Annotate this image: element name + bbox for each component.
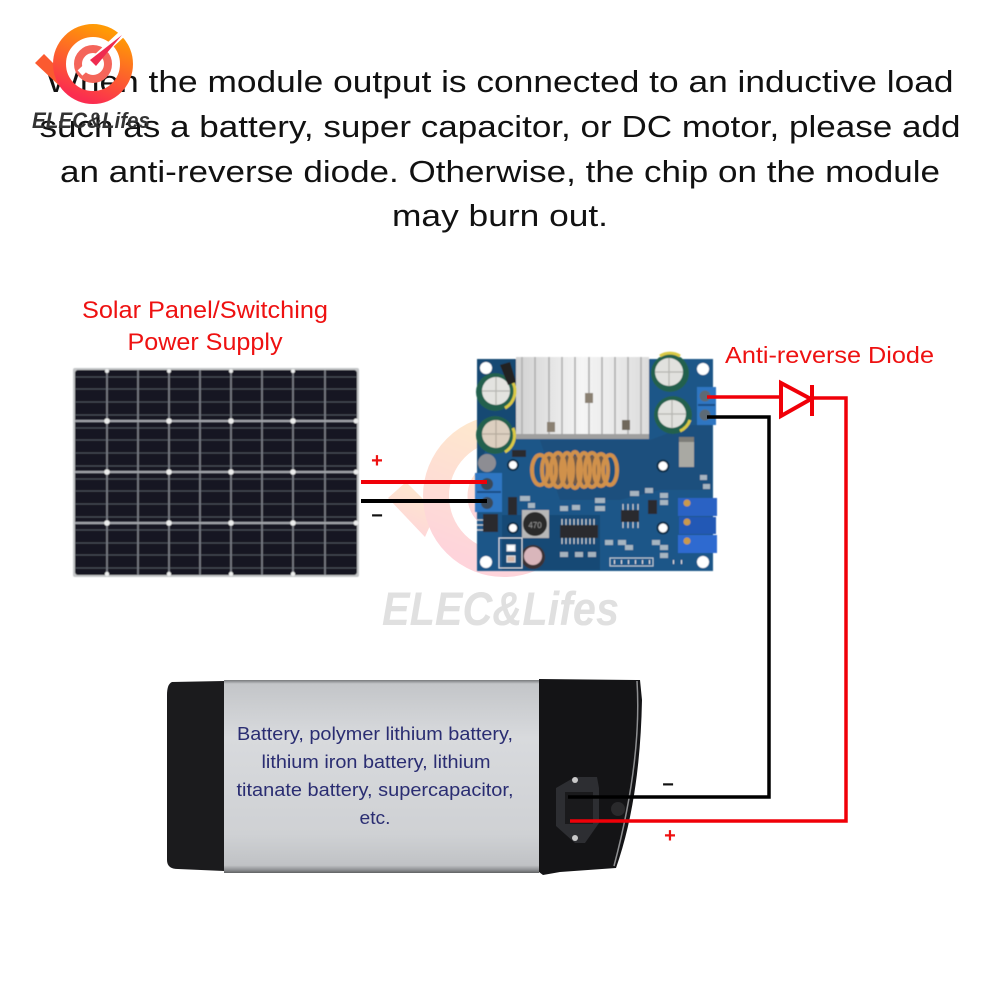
polarity: input plus: + (371, 450, 383, 472)
capacitors (476, 353, 692, 569)
polarity: battery minus: − (662, 774, 674, 796)
polarity: input minus: − (371, 505, 383, 527)
battery text: etc. (360, 807, 390, 828)
battery text: titanate battery, supercapacitor, (236, 779, 514, 800)
watermark text: ELEC&Lifes (382, 582, 619, 635)
input terminal block (475, 473, 502, 512)
gray resistor block (679, 437, 694, 467)
wire: output positive (570, 397, 846, 821)
polarity: battery plus: + (664, 825, 676, 847)
logo text: ELEC&Lifes (32, 108, 150, 133)
header pins (610, 558, 682, 566)
heading text: may burn out. (392, 198, 608, 233)
battery text (236, 723, 514, 828)
solar panel (73, 368, 359, 577)
battery socket (556, 777, 625, 843)
ICs and SMD parts (483, 450, 657, 538)
wire: input positive (361, 480, 487, 484)
heading text: an anti-reverse diode. Otherwise, the chip on the module (60, 154, 940, 189)
label: anti-reverse diode: Anti-reverse Diode (725, 342, 934, 368)
heading text: When the module output is connected to an inductive load (46, 64, 954, 99)
circuit board module (475, 353, 717, 571)
heading text (40, 64, 960, 233)
trimmer potentiometers (678, 498, 717, 553)
watermark logo (388, 428, 572, 564)
copper coil (532, 452, 617, 488)
small diode top-left (500, 362, 516, 385)
heading text: such as a battery, super capacitor, or DC motor, please add (40, 109, 960, 144)
battery text: Battery, polymer lithium battery, (237, 723, 513, 744)
wire: output negative (568, 417, 769, 797)
power inductor: 470 (528, 521, 542, 530)
label: solar panel (82, 297, 328, 356)
output terminal block (697, 387, 716, 425)
icon: diode symbol (781, 383, 812, 416)
heat sink (516, 357, 649, 439)
FAN connector (499, 538, 522, 568)
battery pack (167, 679, 642, 875)
label: solar panel: Solar Panel/Switching (82, 297, 328, 324)
wire: input negative (361, 499, 487, 503)
power inductor (522, 510, 549, 538)
mounting holes (480, 362, 709, 568)
label: solar panel: Power Supply (128, 329, 282, 356)
logo top-left (32, 30, 150, 133)
battery text: lithium iron battery, lithium (262, 751, 490, 772)
